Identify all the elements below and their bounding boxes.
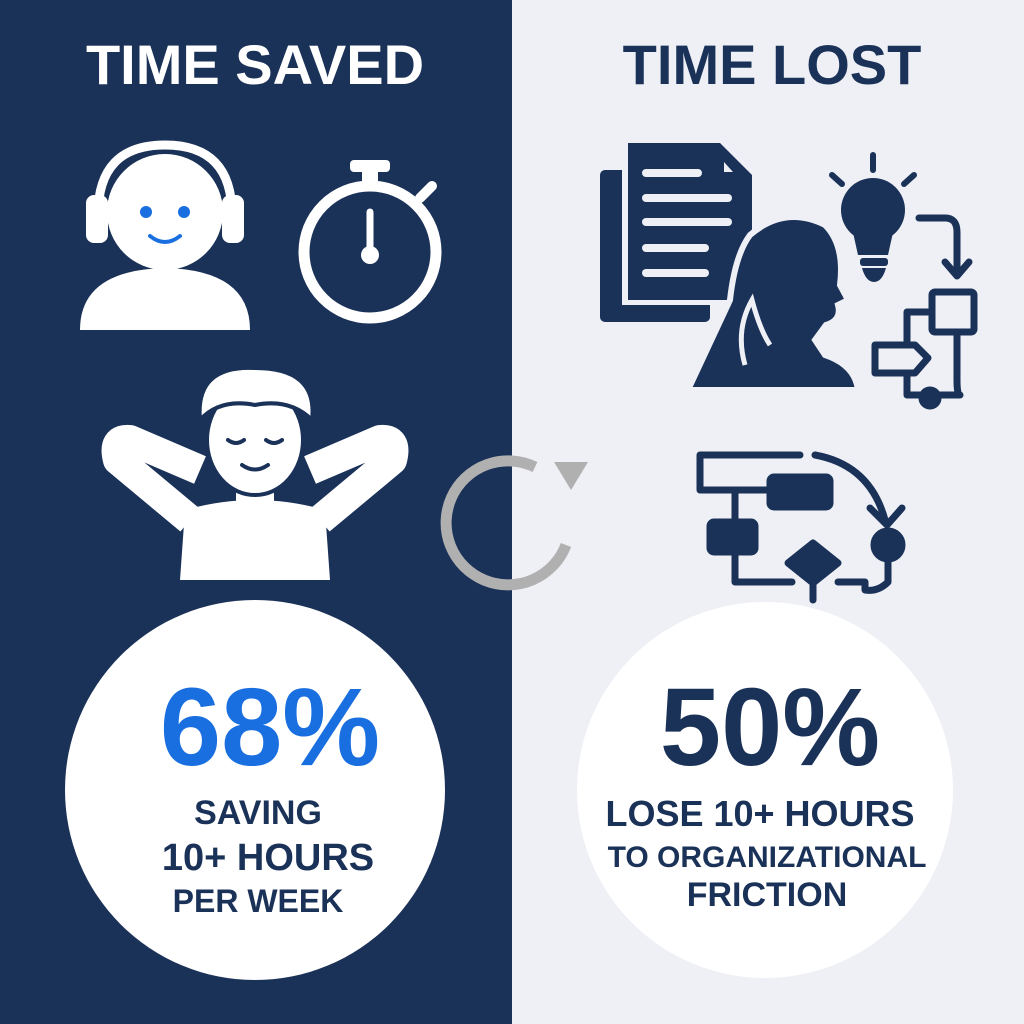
stat circle: 68%: 68%: [160, 666, 380, 789]
stat circle: 50%: FRICTION: [687, 876, 847, 914]
stat circle: 50%: 50%: [660, 666, 880, 789]
panel: time saved background: [0, 0, 512, 1024]
icon: flowchart bottom: [700, 455, 902, 600]
stat circle: 68%: SAVING: [194, 794, 322, 832]
stat circle: 68%: 10+ HOURS: [162, 837, 374, 879]
icon: thinking head silhouette: [688, 217, 858, 390]
title: time saved: TIME SAVED: [86, 33, 424, 96]
icon: documents: [600, 140, 756, 322]
icon: relaxing person: [116, 368, 394, 580]
stat circle: 50%: LOSE 10+ HOURS: [605, 793, 915, 834]
icon: stopwatch: [304, 160, 436, 318]
stat circle: 68%: [65, 600, 445, 980]
icon: refresh arrow: [446, 461, 588, 585]
title: time lost: TIME LOST: [623, 33, 921, 96]
icon: light bulb: [832, 155, 914, 282]
stat circle: 50%: TO ORGANIZATIONAL: [608, 841, 926, 874]
stat circle: 68%: PER WEEK: [173, 883, 343, 919]
panel: time lost background: [512, 0, 1024, 1024]
icon: headset avatar: [80, 145, 250, 330]
icon: flowchart top: [875, 218, 974, 406]
stat circle: 50%: [577, 602, 953, 978]
